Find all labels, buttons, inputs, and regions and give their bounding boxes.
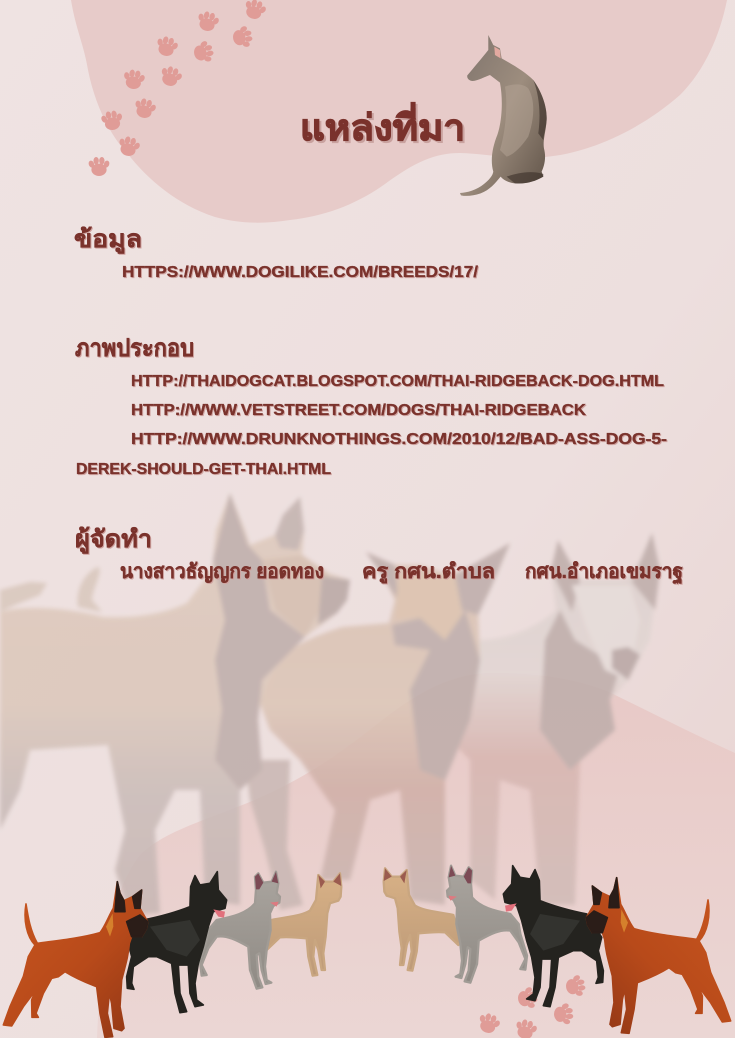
image url 2: HTTP://WWW.VETSTREET.COM/DOGS/THAI-RIDGEBACK <box>131 402 586 419</box>
title: แหล่งที่มา <box>300 102 465 148</box>
bottom decorative blob <box>97 673 735 1038</box>
left group of four dogs <box>3 872 341 1037</box>
image url 3 continued: DEREK-SHOULD-GET-THAI.HTML <box>76 461 331 478</box>
tails of large dogs <box>0 567 102 612</box>
paw prints bottom <box>475 973 587 1038</box>
faded large dogs background photo <box>0 493 660 915</box>
heading: creators: ผู้จัดทำ <box>75 526 152 554</box>
data url: HTTPS://WWW.DOGILIKE.COM/BREEDS/17/ <box>122 264 479 281</box>
sitting dog top right <box>460 35 547 196</box>
paw prints top <box>88 0 269 176</box>
heading: data: ข้อมูล <box>74 226 142 254</box>
section: creators <box>75 526 683 585</box>
creator name: นางสาวธัญญกร ยอดทอง <box>120 561 324 583</box>
section: images <box>75 335 667 478</box>
heading: images: ภาพประกอบ <box>75 335 194 362</box>
section: data source <box>74 226 479 281</box>
image url 1: HTTP://THAIDOGCAT.BLOGSPOT.COM/THAI-RIDGEBACK-DOG.HTML <box>131 373 664 390</box>
large dog right: grey <box>450 533 660 905</box>
image url 3: HTTP://WWW.DRUNKNOTHINGS.COM/2010/12/BAD-ASS-DOG-5- <box>131 431 667 448</box>
creator office: กศน.อำเภอเขมราฐ <box>525 561 683 585</box>
creator role: ครู กศน.ตำบล <box>362 561 495 585</box>
top decorative blob <box>71 0 727 223</box>
large dog middle: tan <box>245 543 510 910</box>
large dog left: tan <box>0 493 350 915</box>
right group of four dogs <box>384 866 731 1033</box>
